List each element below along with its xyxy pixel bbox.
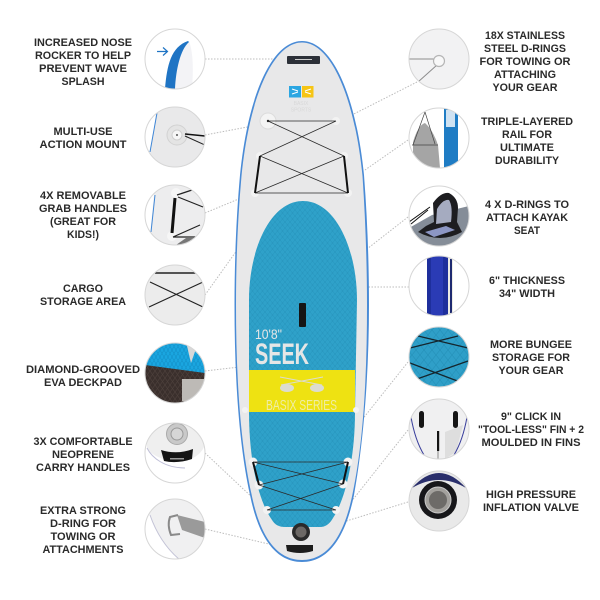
label: action mount — [40, 126, 127, 151]
label: deckpad: EVA DECKPAD — [44, 377, 122, 389]
label: grab handles: GRAB HANDLES — [39, 203, 127, 215]
label: triple rail: ULTIMATE — [500, 142, 554, 154]
label: deckpad — [26, 364, 140, 389]
callout: carry handles — [145, 423, 205, 483]
label: valve: HIGH PRESSURE — [486, 489, 576, 501]
front bungee — [255, 121, 348, 193]
label: cargo: STORAGE AREA — [40, 296, 126, 308]
callout: d-ring — [145, 499, 205, 560]
label: d-ring: EXTRA STRONG — [40, 505, 126, 517]
callout: bungee storage — [409, 327, 469, 387]
callout: action mount — [145, 107, 205, 167]
label: triple rail — [481, 116, 573, 167]
label: bungee storage — [490, 339, 572, 377]
label: fins: MOULDED IN FINS — [482, 437, 581, 449]
callout: grab handles — [145, 185, 205, 245]
valve — [292, 523, 310, 541]
board outer rail — [234, 41, 369, 562]
paddle board — [234, 41, 369, 562]
label: triple rail: RAIL FOR — [502, 129, 552, 141]
label: kayak seat — [485, 199, 569, 237]
label: fins: 9" CLICK IN — [501, 411, 561, 423]
label: d-ring — [40, 505, 126, 556]
label: grab handles: (GREAT FOR — [50, 216, 116, 228]
label: d-ring: TOWING OR — [50, 531, 116, 543]
leader lines — [205, 59, 417, 545]
label: kayak seat: ATTACH KAYAK — [486, 212, 569, 224]
logo: SPORTS — [291, 108, 312, 114]
yellow series band — [249, 370, 355, 412]
label: kayak seat: SEAT — [514, 225, 540, 237]
callout: triple rail — [409, 108, 469, 168]
centre handle — [299, 303, 306, 327]
logo: BASIX — [294, 101, 309, 107]
tail handle — [286, 545, 313, 553]
label: action mount: MULTI-USE — [54, 126, 113, 138]
label: fins: "TOOL-LESS" FIN + 2 — [478, 424, 584, 436]
callout: deckpad — [145, 343, 205, 403]
label: nose rocker: INCREASED NOSE — [34, 37, 132, 49]
label: nose rocker — [34, 37, 132, 88]
model name: SEEK — [255, 338, 309, 371]
label: grab handles — [39, 190, 127, 241]
paddles icon — [280, 377, 324, 392]
label: nose rocker: ROCKER TO HELP — [35, 50, 131, 62]
label: fins — [478, 411, 584, 449]
label: d-ring: D-RING FOR — [50, 518, 116, 530]
label: action mount: ACTION MOUNT — [40, 139, 127, 151]
label: valve: INFLATION VALVE — [483, 502, 579, 514]
label: nose rocker: PREVENT WAVE — [39, 63, 127, 75]
logo — [289, 86, 314, 114]
board deck surface — [236, 42, 367, 560]
callout: cargo storage — [145, 265, 205, 325]
callout: stainless d-rings — [409, 29, 469, 89]
rear bungee — [253, 462, 348, 510]
label: thickness — [489, 275, 565, 300]
label: stainless d-rings: ATTACHING — [494, 69, 556, 81]
label: carry handles: CARRY HANDLES — [36, 462, 130, 474]
deck pad — [249, 201, 357, 527]
nose handle — [287, 56, 320, 64]
label: grab handles: KIDS!) — [67, 229, 99, 241]
label: stainless d-rings: 18X STAINLESS — [485, 30, 565, 42]
label: carry handles: 3X COMFORTABLE — [34, 436, 133, 448]
label: carry handles — [34, 436, 133, 474]
label: stainless d-rings: YOUR GEAR — [492, 82, 558, 94]
d-ring pads — [242, 117, 359, 514]
label: thickness: 6" THICKNESS — [489, 275, 565, 287]
label: bungee storage: MORE BUNGEE — [490, 339, 572, 351]
callout: nose rocker — [145, 29, 205, 89]
label: cargo: CARGO — [63, 283, 103, 295]
label: nose rocker: SPLASH — [62, 76, 104, 88]
label: valve — [483, 489, 579, 514]
callout: thickness — [409, 256, 469, 316]
label: stainless d-rings: STEEL D-RINGS — [484, 43, 566, 55]
label: thickness: 34" WIDTH — [499, 288, 555, 300]
callout: valve — [409, 471, 469, 531]
label: d-ring: ATTACHMENTS — [42, 544, 124, 556]
label: cargo — [40, 283, 126, 308]
label: deckpad: DIAMOND-GROOVED — [26, 364, 140, 376]
callout: fins — [409, 399, 469, 459]
label: kayak seat: 4 X D-RINGS TO — [485, 199, 569, 211]
length text: 10'8" — [255, 326, 282, 342]
series text: BASIX SERIES — [266, 397, 337, 414]
label: stainless d-rings: FOR TOWING OR — [480, 56, 570, 68]
label: triple rail: DURABILITY — [495, 155, 559, 167]
callout: kayak seat — [409, 186, 469, 246]
label: carry handles: NEOPRENE — [52, 449, 114, 461]
action mount — [260, 113, 276, 129]
label: bungee storage: YOUR GEAR — [498, 365, 564, 377]
label: grab handles: 4X REMOVABLE — [40, 190, 126, 202]
label: bungee storage: STORAGE FOR — [492, 352, 570, 364]
label: stainless d-rings — [480, 30, 570, 94]
label: triple rail: TRIPLE-LAYERED — [481, 116, 573, 128]
